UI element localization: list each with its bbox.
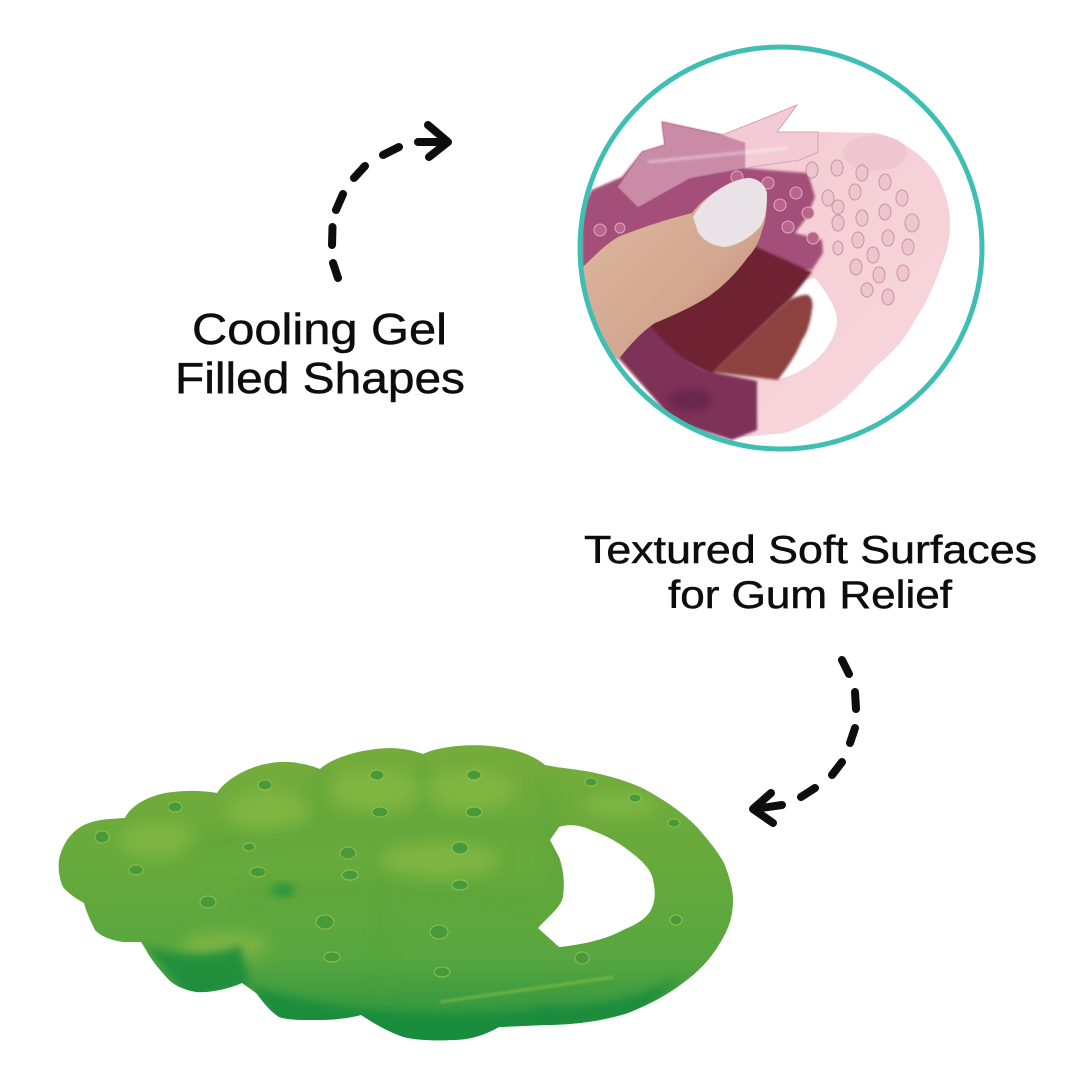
hole in teether: [777, 278, 837, 379]
arrow: up to the circle photo: [332, 125, 448, 278]
photo: strawberry teether in circle: [580, 47, 982, 449]
crown highlight: [648, 148, 788, 162]
bumps: [95, 770, 682, 977]
dark green base: [145, 945, 680, 1050]
crown right: [722, 105, 818, 168]
heading: cooling gel: Filled Shapes: [175, 354, 465, 403]
lower ring: [612, 320, 757, 440]
back hand shadow: [640, 245, 812, 375]
heading: textured surfaces: Textured Soft Surfaces: [584, 529, 1037, 572]
light lobes: [118, 770, 658, 959]
crown: [618, 122, 745, 207]
heading: cooling gel: [175, 305, 465, 403]
strawberry teether body: [582, 105, 950, 438]
heading: textured surfaces: for Gum Relief: [668, 574, 952, 617]
heading: cooling gel: Cooling Gel: [192, 305, 447, 354]
dark creases: [188, 775, 564, 876]
back finger: [712, 295, 813, 380]
thumb: [582, 178, 767, 360]
arrow: down to the green teether: [753, 660, 856, 823]
teether body: [50, 740, 740, 1045]
teal circle outline: [580, 47, 982, 449]
dark pink blotch: [582, 120, 825, 272]
dark spot: [271, 883, 295, 897]
thumbnail: [693, 178, 767, 247]
big bubble: [843, 135, 907, 171]
heading: textured surfaces: [584, 529, 1037, 617]
ring shadow blotches: [668, 388, 712, 412]
teether seeds: [806, 160, 919, 305]
photo: green grape teether: [50, 740, 740, 1050]
lime streak: [440, 977, 614, 1002]
seeds on dark area: [594, 171, 819, 244]
